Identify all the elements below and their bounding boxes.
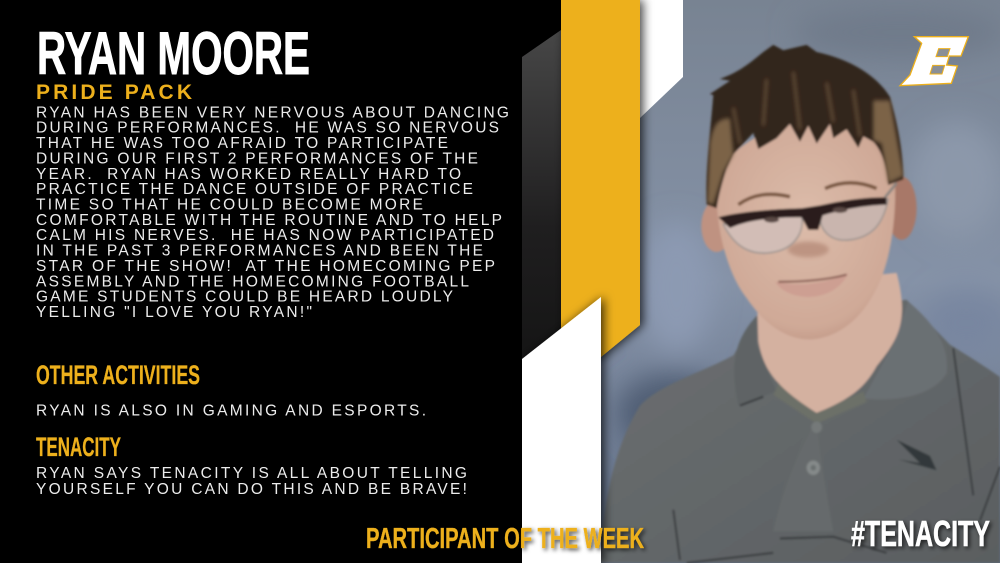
text: other activities: RYAN IS ALSO IN GAMING AND ESPORTS. (36, 403, 426, 420)
heading: tenacity: TENACITY (36, 432, 121, 462)
white lower ribbon (522, 297, 601, 563)
heading: other activities: OTHER ACTIVITIES (36, 360, 200, 390)
body text: story: DURING PERFORMANCES. HE WAS SO NERVOUS (36, 120, 499, 137)
dark grey ribbon (522, 30, 561, 360)
text: tenacity (36, 465, 467, 498)
mouth (775, 274, 848, 297)
glasses (718, 183, 897, 253)
gold ribbon (561, 0, 640, 357)
title: RYAN MOORE (37, 20, 310, 87)
eyebrows (738, 183, 877, 205)
neck (757, 273, 902, 413)
body text: story: DURING OUR FIRST 2 PERFORMANCES OF THE (36, 150, 478, 167)
body text: story: CALM HIS NERVES. HE HAS NOW PARTICIPATED (36, 227, 494, 244)
body text: story: THAT HE WAS TOO AFRAID TO PARTICIPATE (36, 135, 448, 152)
body text: story: RYAN HAS BEEN VERY NERVOUS ABOUT DANCING (36, 104, 509, 121)
text: tenacity: RYAN SAYS TENACITY IS ALL ABOUT TELLING (36, 465, 467, 482)
face (716, 120, 895, 339)
body text: story: ASSEMBLY AND THE HOMECOMING FOOTBALL (36, 273, 469, 290)
subtitle: team name: PRIDE PACK (36, 81, 192, 104)
ears (701, 177, 917, 252)
body text: story: GAME STUDENTS COULD BE HEARD LOUDLY (36, 289, 453, 306)
hair (706, 45, 903, 208)
body text: story: IN THE PAST 3 PERFORMANCES AND BEEN THE (36, 243, 483, 260)
person (600, 45, 1000, 563)
icon: school E logo (900, 37, 968, 86)
body text: story: STAR OF THE SHOW! AT THE HOMECOMING PEP (36, 258, 495, 275)
body text: story: COMFORTABLE WITH THE ROUTINE AND TO HELP (36, 212, 502, 229)
nose shadow (788, 242, 829, 257)
body text: story: YELLING "I LOVE YOU RYAN!" (36, 304, 312, 321)
white upper ribbon (640, 0, 683, 118)
body text: story: PRACTICE THE DANCE OUTSIDE OF PRACTICE (36, 181, 473, 198)
text: tenacity: YOURSELF YOU CAN DO THIS AND BE BRAVE! (36, 481, 467, 498)
footer label: participant of the week: PARTICIPANT OF THE WEEK (366, 523, 644, 555)
body text: story: YEAR. RYAN HAS WORKED REALLY HARD TO (36, 166, 461, 183)
shirt (600, 300, 1000, 563)
body text: story: TIME SO THAT HE COULD BECOME MORE (36, 196, 423, 214)
photo backdrop mottling (617, 7, 1000, 452)
body text: story (36, 104, 509, 321)
portrait photo (600, 0, 1000, 563)
